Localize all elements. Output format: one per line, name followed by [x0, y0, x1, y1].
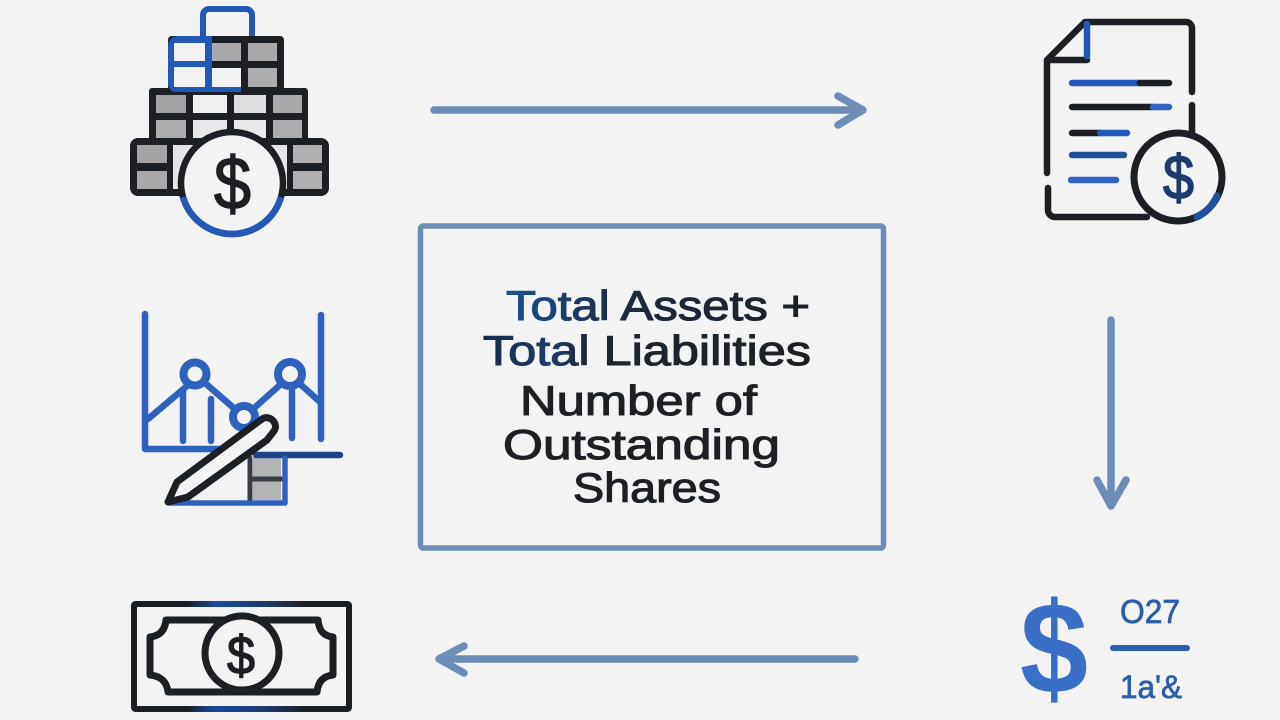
icon: stacked blocks with dollar coin [130, 9, 329, 234]
arrow: top, pointing right [434, 96, 863, 125]
chart data points [184, 362, 302, 428]
middle row of blocks [149, 88, 308, 144]
arrow: right, pointing down [1097, 320, 1126, 506]
pencil [168, 418, 275, 502]
banknote dollar sign: $ [227, 626, 255, 686]
icon: dollar banknote [134, 604, 349, 709]
formula numerator [483, 282, 811, 374]
base block [170, 455, 340, 503]
large dollar sign: $ [1020, 575, 1088, 720]
banknote inner border [150, 620, 333, 692]
dollar coin on document: $ [1163, 144, 1194, 213]
fraction numerator: O27 [1120, 593, 1180, 630]
dollar coin: $ [214, 142, 251, 225]
formula numerator: Total Assets + [506, 282, 810, 329]
fraction denominator: 1a'& [1120, 669, 1182, 705]
dollar coin [181, 132, 283, 234]
chart axes and bars [145, 314, 321, 449]
icon: document with dollar coin [1047, 22, 1222, 221]
banknote coin [205, 616, 279, 690]
fraction bar [1113, 645, 1187, 651]
dollar coin on document [1134, 133, 1222, 221]
arrow: bottom, pointing left [439, 646, 855, 673]
panel border [420, 226, 884, 548]
formula denominator: Number of [520, 377, 757, 424]
formula denominator: Outstanding [503, 421, 780, 468]
top row of blocks [168, 36, 284, 92]
top blue block [203, 9, 252, 36]
result: dollar sign with fraction [1020, 575, 1187, 720]
document outline [1047, 22, 1192, 217]
formula denominator: Shares [573, 464, 721, 511]
icon: line chart with pencil [145, 314, 340, 503]
banknote outer frame [134, 604, 349, 709]
formula panel [420, 226, 884, 548]
text lines on document [1071, 83, 1169, 180]
bottom row of blocks [130, 138, 329, 196]
formula numerator: Total Liabilities [483, 327, 811, 374]
formula denominator [503, 377, 780, 511]
